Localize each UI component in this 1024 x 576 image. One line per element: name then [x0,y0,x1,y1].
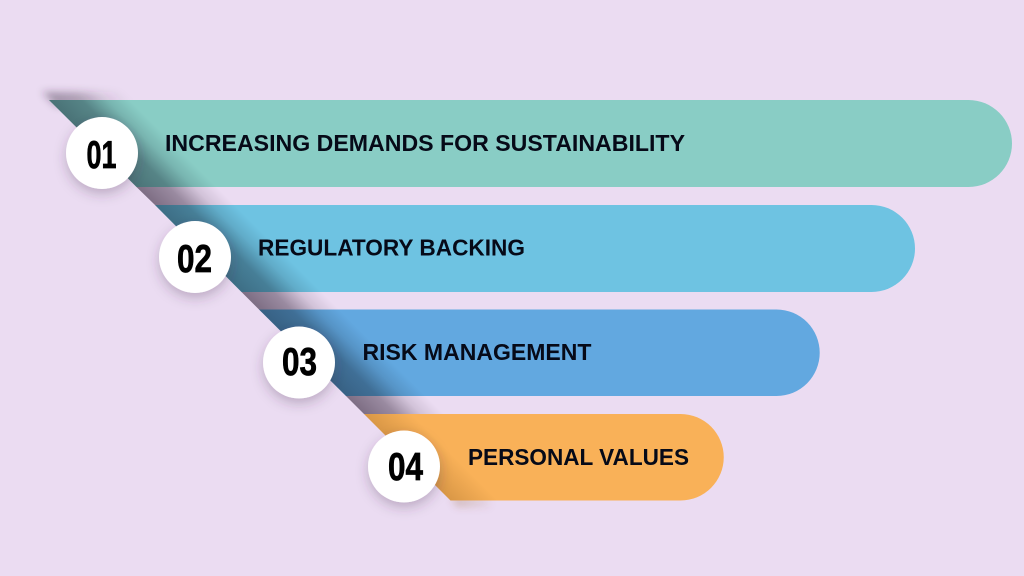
label 4: PERSONAL VALUES [468,444,689,470]
badge 04 [368,430,440,502]
label 2: REGULATORY BACKING [258,234,525,260]
bar 1 [49,100,1012,187]
shadow gaps between bars [42,92,490,507]
badge 02 [159,221,231,293]
bar 4 [364,414,724,500]
badge 01: 01 [86,134,116,177]
badge 02: 02 [177,238,212,281]
badge 04: 04 [388,446,423,489]
bar 3 [259,310,820,396]
badge 03: 03 [282,341,317,384]
label 3: RISK MANAGEMENT [362,339,592,365]
badge 03 [263,326,335,398]
bar 2 [155,205,915,292]
label 1: INCREASING DEMANDS FOR SUSTAINABILITY [165,130,685,156]
badge 01 [66,117,138,189]
